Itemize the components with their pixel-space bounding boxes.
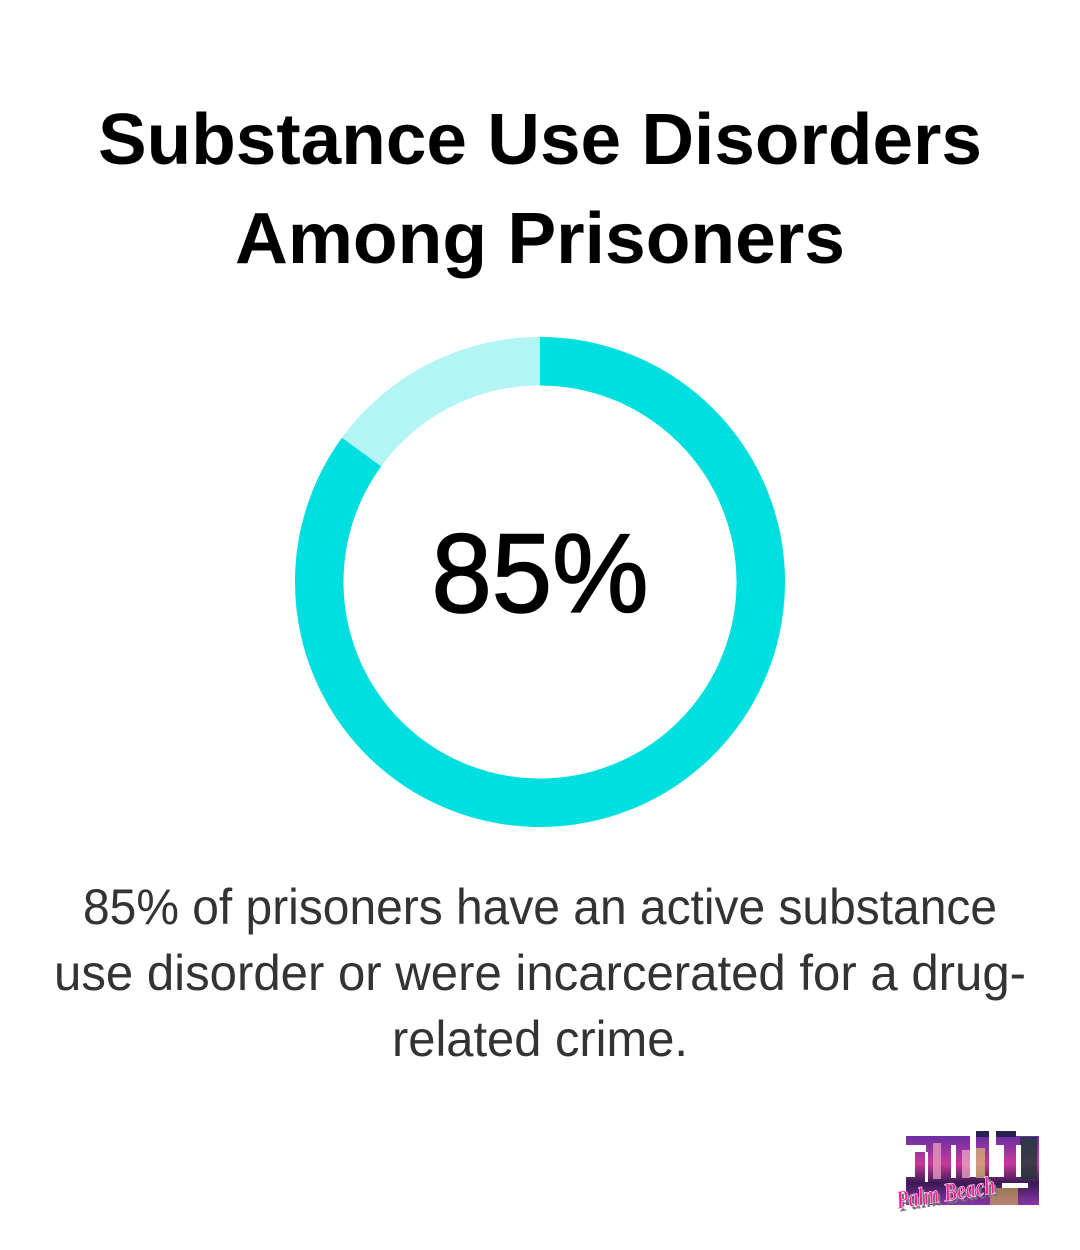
logo: Amity Palm Beach — [893, 1131, 1039, 1218]
logo: Amity Palm Beach: Palm Beach — [896, 1173, 1000, 1218]
donut chart: 85% — [319, 361, 761, 803]
title: Among Prisoners — [235, 199, 845, 279]
description text — [54, 879, 1026, 1067]
description text: use disorder or were incarcerated for a drug- — [54, 945, 1026, 1001]
logo: Amity Palm Beach: Palm Beach — [893, 1171, 997, 1215]
center value: 85% — [432, 511, 648, 636]
description text: related crime. — [392, 1011, 688, 1067]
description text: 85% of prisoners have an active substance — [83, 879, 997, 935]
title: Substance Use Disorders — [98, 100, 982, 180]
title — [98, 100, 982, 279]
